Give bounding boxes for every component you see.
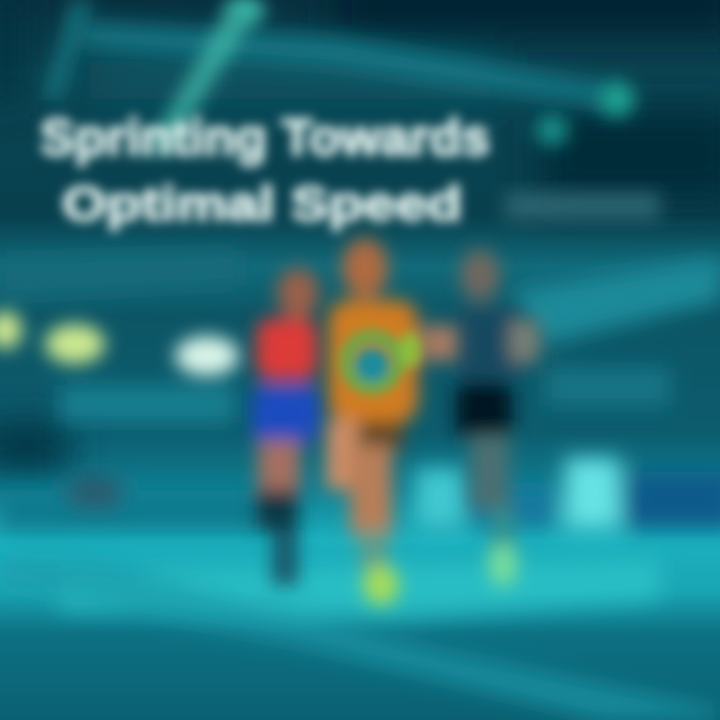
track lights left [0, 311, 239, 376]
dark upper corners [0, 0, 720, 470]
runner: centre, orange top [326, 238, 458, 605]
lower stadium band [0, 458, 720, 530]
chest ring graphic [346, 332, 421, 388]
runner: right, dark kit [455, 249, 540, 587]
track surface streaks [0, 560, 720, 720]
title text [40, 109, 490, 231]
title text: Optimal Speed [62, 178, 462, 231]
diagonal glowing streak [44, 0, 258, 150]
runner: left, red top and blue shorts [252, 268, 320, 585]
title text: Sprinting Towards [40, 109, 490, 167]
glowing orbs [225, 0, 635, 146]
upper light beams [0, 22, 720, 423]
runners [252, 238, 540, 605]
subtitle bar right [505, 192, 660, 220]
